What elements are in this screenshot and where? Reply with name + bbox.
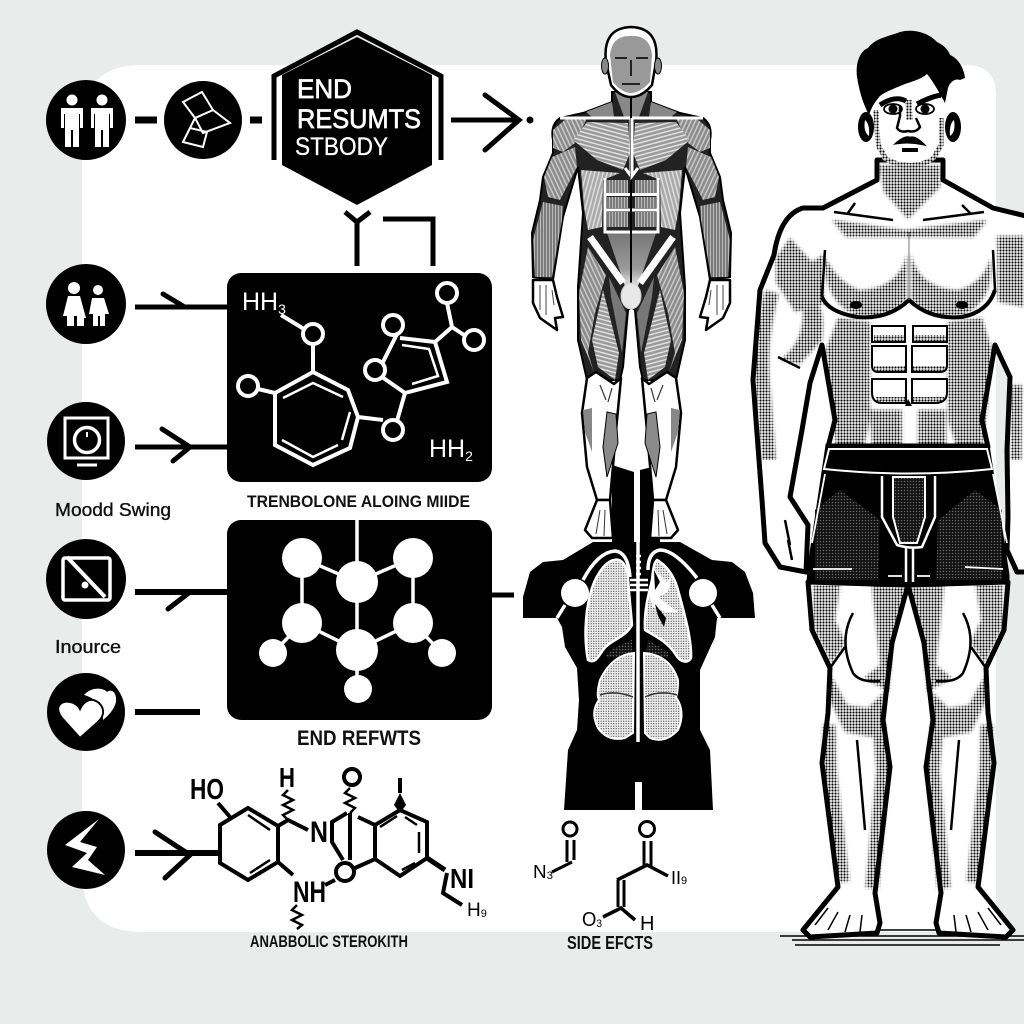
label: end refuts: END REFWTS xyxy=(297,727,421,750)
chemical structure: anabolic steroid: H xyxy=(467,900,481,921)
joint right xyxy=(689,579,717,607)
label: inource: Inource xyxy=(55,637,121,657)
background panel xyxy=(82,65,996,932)
floor lines xyxy=(780,930,1024,945)
joints xyxy=(561,579,589,607)
chemical structure: small fragments: 3 xyxy=(596,918,602,930)
groin xyxy=(621,283,641,309)
hexagon title: END xyxy=(297,74,352,104)
icon: monitor xyxy=(47,402,125,480)
chemical structure: small fragments: 3 xyxy=(547,870,553,882)
nipples xyxy=(850,301,862,309)
lung right xyxy=(645,560,691,662)
chemical structure: small fragments: H xyxy=(640,913,654,935)
icon: adult and child xyxy=(46,264,126,344)
muscular man illustration xyxy=(740,31,1024,945)
airway dark xyxy=(654,570,666,627)
chest line xyxy=(822,290,995,317)
head xyxy=(602,27,662,97)
chemical structure: anabolic steroid: NI xyxy=(450,863,474,894)
dot xyxy=(526,116,534,124)
torso organ diagram xyxy=(523,465,755,810)
intestines right xyxy=(644,653,682,740)
upper body xyxy=(740,150,1024,572)
hexagon title: STBODY xyxy=(295,133,388,161)
chemical structure: anabolic steroid xyxy=(190,762,487,929)
label: mood swing: Moodd Swing xyxy=(55,500,171,520)
icon: hearts xyxy=(47,673,125,751)
chemical structure: anabolic steroid: H xyxy=(279,762,295,793)
panel: molecule box one: HH xyxy=(242,288,278,316)
panel: molecule box one: 3 xyxy=(278,301,286,317)
label: side effects: SIDE EFCTS xyxy=(567,933,653,953)
connector lines and arrows xyxy=(135,95,519,878)
ears xyxy=(858,112,961,142)
right half mirrored xyxy=(631,92,731,538)
hand lines xyxy=(785,520,792,560)
chemical structure: small fragments xyxy=(533,822,687,935)
white knee and shin xyxy=(582,372,621,500)
legs xyxy=(795,575,1021,937)
intestine folds xyxy=(600,693,677,697)
shaded patches xyxy=(606,640,668,658)
hair xyxy=(857,31,965,115)
panel: molecule box one: 2 xyxy=(465,448,473,464)
icon: lightning xyxy=(47,811,125,889)
panel: molecule box one: HH xyxy=(429,435,465,463)
shorts xyxy=(808,445,1008,582)
chemical structure: anabolic steroid: NH xyxy=(293,876,326,909)
label: anabolic: ANABBOLIC STEROKITH xyxy=(250,932,408,951)
chemical structure: anabolic steroid: HO xyxy=(190,774,224,806)
icon: crossed square xyxy=(46,539,126,619)
lung left xyxy=(586,560,632,661)
trachea xyxy=(630,556,648,590)
intestines xyxy=(594,653,634,739)
muscle anatomy figure xyxy=(532,27,731,538)
face xyxy=(873,85,944,168)
halftone shading xyxy=(740,150,1024,460)
icon: molecule squares xyxy=(164,81,242,159)
chemical structure: small fragments: II9 xyxy=(671,868,687,888)
label: trenbolone: TRENBOLONE ALOING MIIDE xyxy=(247,492,470,511)
chemical structure: anabolic steroid: 9 xyxy=(481,908,487,920)
airway xyxy=(649,568,678,612)
lines xyxy=(557,468,720,742)
hexagon title xyxy=(274,32,441,205)
panel: molecule box two xyxy=(227,520,492,720)
chemical structure: small fragments: N xyxy=(533,862,546,882)
hexagon title: RESUMTS xyxy=(297,104,421,134)
panel: molecule box one xyxy=(227,273,492,482)
center chest line xyxy=(908,232,910,300)
abs xyxy=(872,326,947,403)
abs shading xyxy=(874,335,946,402)
icon: two people xyxy=(46,80,126,160)
chemical structure: anabolic steroid: N xyxy=(310,816,328,849)
chemical structure: small fragments: O xyxy=(582,909,598,931)
silhouette xyxy=(523,465,755,810)
nipple right xyxy=(956,301,968,309)
left half xyxy=(532,92,632,538)
